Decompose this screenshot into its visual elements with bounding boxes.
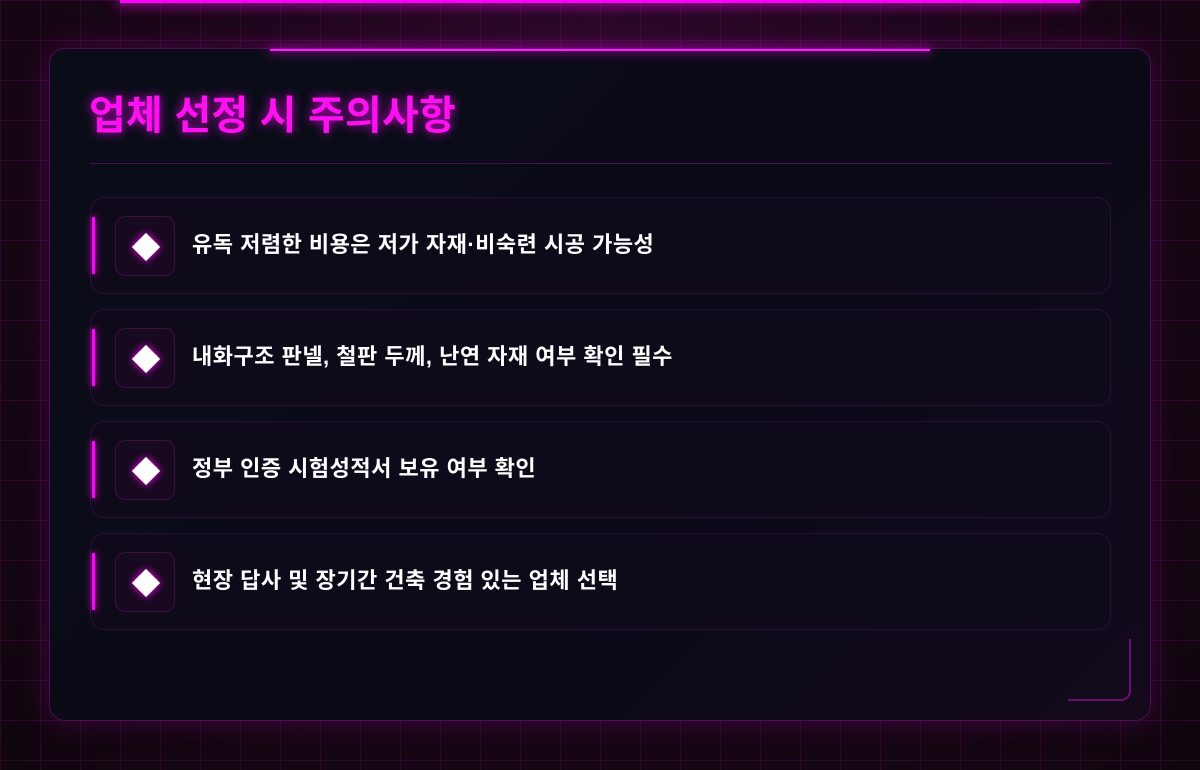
icon: diamond — [115, 328, 175, 388]
text 3: 정부 인증 시험성적서 보유 여부 확인 — [192, 456, 536, 481]
text 2: 내화구조 판넬, 철판 두께, 난연 자재 여부 확인 필수 — [192, 344, 673, 369]
text 1: 유독 저렴한 비용은 저가 자재·비숙련 시공 가능성 — [192, 232, 654, 257]
item 4 — [90, 533, 1111, 630]
icon: diamond — [115, 216, 175, 276]
icon: diamond — [115, 552, 175, 612]
item 1 — [90, 197, 1111, 294]
icon: diamond — [115, 440, 175, 500]
text 4: 현장 답사 및 장기간 건축 경험 있는 업체 선택 — [192, 568, 618, 593]
item 2 — [90, 309, 1111, 406]
title: 업체 선정 시 주의사항 — [89, 94, 456, 138]
item 3 — [90, 421, 1111, 518]
